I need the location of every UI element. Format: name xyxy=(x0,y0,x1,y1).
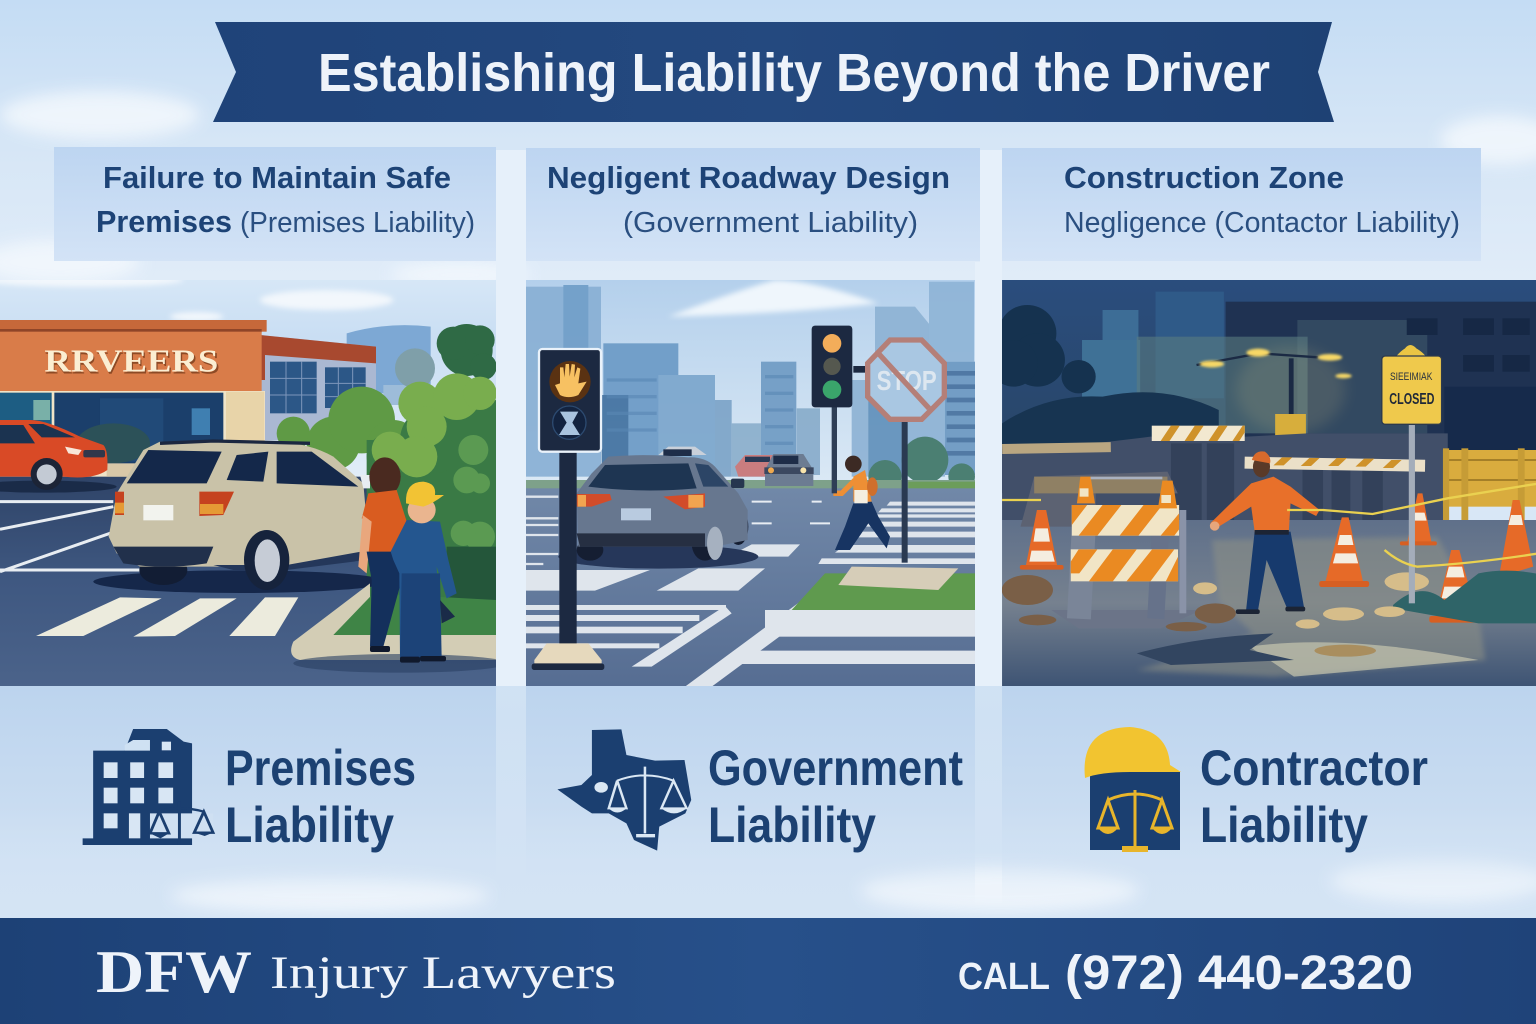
premises liability label: Liability xyxy=(225,797,394,853)
icon: hard hat with scales xyxy=(1085,727,1181,852)
night skyline xyxy=(1082,292,1536,452)
panel heading: premises: (Premises Liability) xyxy=(240,207,475,239)
illustration: parking lot xyxy=(0,273,507,687)
panel heading: roadway: Negligent Roadway Design xyxy=(547,160,950,195)
median xyxy=(792,573,975,610)
beige SUV xyxy=(93,441,387,593)
back barricade xyxy=(1021,472,1178,527)
phone number: (972) 440-2320 xyxy=(1065,947,1413,1000)
crossed-out stop sign xyxy=(868,340,944,563)
cones xyxy=(1020,493,1533,623)
main barricade xyxy=(1051,477,1202,628)
lot lines xyxy=(0,502,140,572)
road surface xyxy=(525,488,975,687)
yellow wood barrier xyxy=(1442,448,1536,520)
panel heading: premises xyxy=(54,147,496,261)
vertical light strips between columns xyxy=(496,150,1002,686)
distant cars xyxy=(658,447,814,486)
panel heading: construction xyxy=(1002,148,1481,261)
crossed-out stop sign: STOP xyxy=(877,365,937,396)
contractor liability label: Contractor xyxy=(1200,740,1428,796)
panel heading: premises: Failure to Maintain Safe xyxy=(103,160,451,195)
firm name xyxy=(96,939,616,1005)
firm name: Injury Lawyers xyxy=(270,947,616,999)
woman xyxy=(358,457,408,652)
premises liability label xyxy=(225,740,416,853)
icon: premises building with scales xyxy=(83,729,213,845)
contractor liability label xyxy=(1200,740,1428,853)
illustration: construction zone xyxy=(990,280,1536,686)
panel heading: premises: Premises xyxy=(96,204,232,239)
pedestrian signal xyxy=(532,349,604,670)
crosswalk xyxy=(36,597,298,637)
phone number: CALL xyxy=(958,956,1050,998)
grey car xyxy=(558,455,758,569)
distant trees xyxy=(868,436,975,480)
distant tower xyxy=(347,325,431,393)
illustration: parking lot: RRVEERS xyxy=(44,343,218,379)
worker xyxy=(1210,451,1320,614)
panel heading: construction: Negligence (Contactor Liability) xyxy=(1064,207,1460,239)
crosswalk stripes xyxy=(526,497,975,687)
contractor liability label: Liability xyxy=(1200,797,1368,853)
government liability label: Government xyxy=(708,740,963,796)
ground xyxy=(1002,520,1536,686)
pedestrian xyxy=(833,456,890,550)
panel heading: roadway xyxy=(526,148,980,261)
dark trees xyxy=(1002,305,1096,394)
premises liability label: Premises xyxy=(225,740,416,796)
caution tape xyxy=(1002,482,1536,567)
store xyxy=(260,335,376,440)
curb and grass xyxy=(291,583,496,660)
icon: Texas with scales xyxy=(557,729,691,851)
shrubs and rubble xyxy=(1002,571,1536,631)
title banner xyxy=(213,22,1334,122)
panel heading: roadway: (Government Liability) xyxy=(623,207,918,239)
footer bar xyxy=(0,918,1536,1024)
red car xyxy=(0,420,117,493)
street lamp xyxy=(1196,346,1354,436)
hand glyph xyxy=(555,364,587,397)
trees back xyxy=(437,324,497,380)
firm name: DFW xyxy=(96,939,252,1005)
closed sign: CLOSED xyxy=(1389,391,1434,408)
traffic signal xyxy=(812,326,867,493)
asphalt xyxy=(0,477,496,687)
lower column tints xyxy=(0,686,1536,906)
panel heading: construction: Construction Zone xyxy=(1064,160,1344,195)
title: Establishing Liability Beyond the Driver xyxy=(318,43,1270,103)
shrubs xyxy=(276,386,405,468)
concrete barriers xyxy=(1002,433,1448,527)
child in hard hat xyxy=(391,482,457,663)
illustration: intersection xyxy=(525,280,975,687)
store sign: RRVEERS xyxy=(45,345,220,381)
government liability label: Liability xyxy=(708,797,876,853)
city skyline xyxy=(526,282,975,478)
striped rails xyxy=(1002,426,1425,472)
closed sign: SIEEIMIAK xyxy=(1390,371,1433,383)
closed sign xyxy=(1382,345,1442,603)
government liability label xyxy=(708,740,963,853)
